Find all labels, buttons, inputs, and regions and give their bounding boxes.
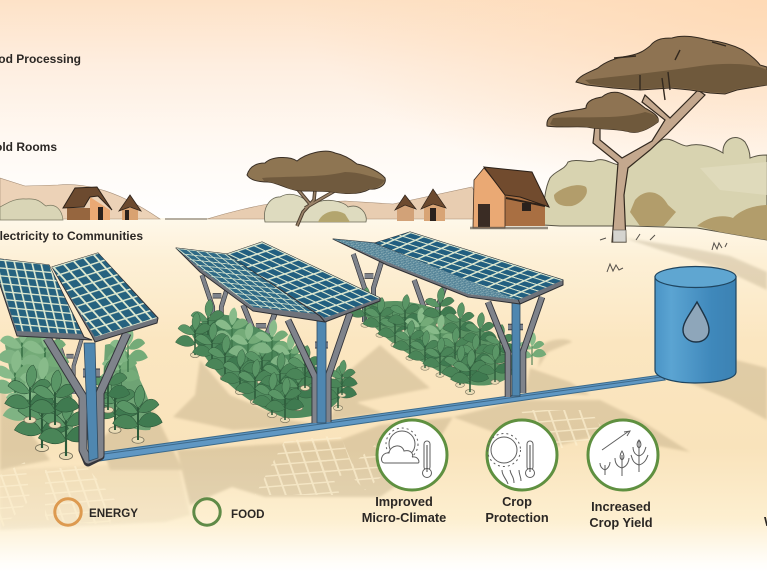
icon: increased crop yield — [588, 420, 658, 490]
label: crop protection — [485, 494, 549, 525]
background ground — [0, 218, 767, 575]
label: increased crop yield — [589, 499, 653, 530]
big acacia tree — [547, 36, 767, 242]
label: crop protection: Crop — [502, 494, 532, 509]
small tree with bushes — [247, 151, 385, 226]
label: increased crop yield: Crop Yield — [589, 515, 653, 530]
grass tufts — [600, 234, 727, 272]
large hut — [470, 167, 549, 228]
water pipe — [92, 375, 665, 462]
light grid patches on ground — [0, 410, 610, 530]
hills — [0, 178, 490, 220]
label: improved micro-climate: Micro-Climate — [362, 510, 446, 525]
background sky — [0, 0, 767, 220]
front frame A — [47, 333, 127, 462]
hut group centre — [395, 189, 446, 221]
front frame C — [488, 297, 542, 397]
legend: energy — [55, 499, 138, 525]
large bushes — [543, 138, 767, 240]
label: crop protection: Protection — [485, 510, 549, 525]
crops row B — [175, 300, 357, 423]
icon: water drop — [683, 302, 709, 342]
icon: improved micro-climate — [377, 420, 447, 490]
crops row C — [348, 288, 546, 395]
frames back and middle — [57, 251, 448, 394]
solar panel C — [333, 232, 563, 304]
legend: food — [194, 499, 264, 525]
hut group left — [63, 187, 141, 220]
label: improved micro-climate: Improved — [375, 494, 433, 509]
ground shadows — [0, 238, 767, 530]
legend: food: FOOD — [231, 508, 264, 521]
legend: energy: ENERGY — [89, 507, 138, 520]
front frame B — [288, 313, 350, 423]
label: increased crop yield: Increased — [591, 499, 651, 514]
icon: crop protection — [487, 420, 557, 490]
label: improved micro-climate — [362, 494, 446, 525]
solar panel B — [176, 242, 380, 322]
crops row A — [0, 320, 162, 460]
water tank — [655, 266, 736, 383]
solar panel A — [0, 253, 158, 342]
